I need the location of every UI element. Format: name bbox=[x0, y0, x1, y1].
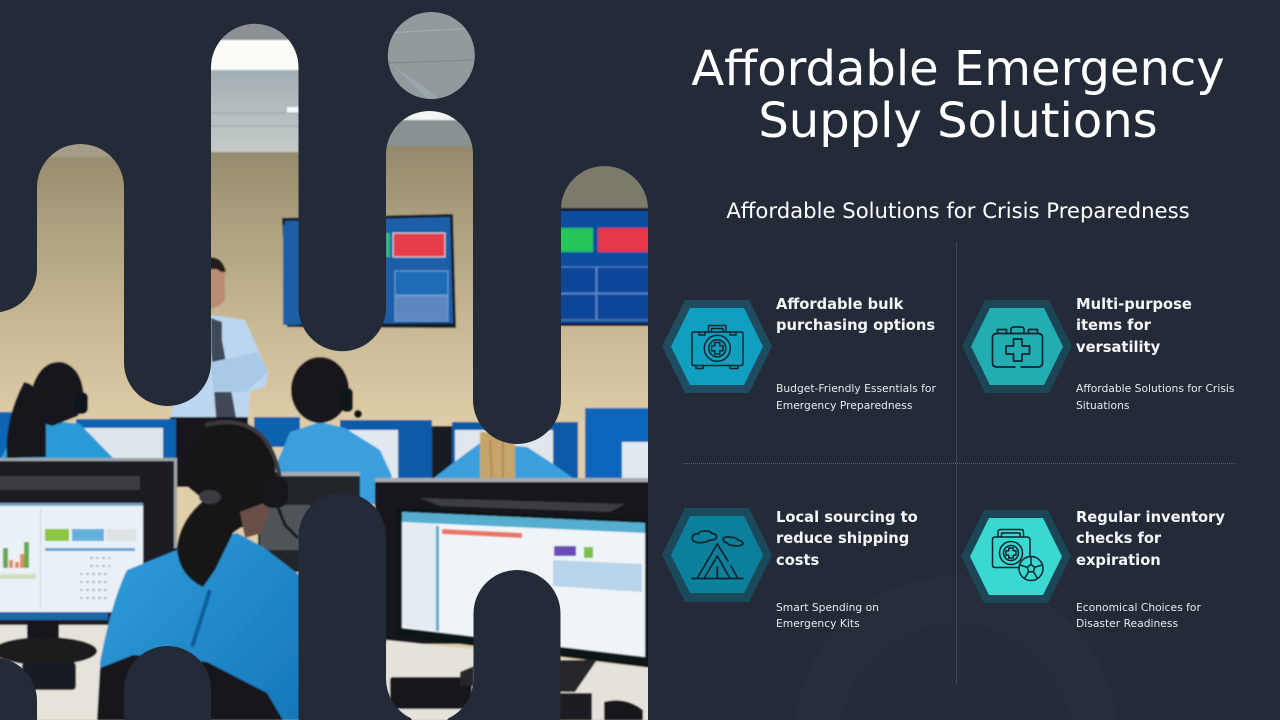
title: Supply Solutions bbox=[758, 93, 1158, 149]
description bbox=[776, 601, 879, 630]
front monitor left bbox=[0, 458, 300, 720]
heading: expiration bbox=[1076, 552, 1161, 569]
item: bulk purchasing bbox=[662, 296, 936, 412]
heading: reduce shipping bbox=[776, 530, 909, 547]
title bbox=[691, 41, 1225, 149]
heading: costs bbox=[776, 552, 819, 569]
ceiling bbox=[30, 20, 652, 210]
photo bbox=[0, 0, 652, 720]
back row monitors bbox=[0, 408, 652, 488]
heading: Multi-purpose bbox=[1076, 296, 1192, 313]
background concentric circles bbox=[780, 560, 1140, 720]
front monitor right bbox=[375, 478, 652, 720]
item: inventory checks bbox=[961, 509, 1225, 630]
icon: first aid case in hexagon bbox=[662, 300, 772, 393]
heading: Regular inventory bbox=[1076, 509, 1225, 526]
description: Emergency Preparedness bbox=[776, 399, 912, 412]
description: Affordable Solutions for Crisis bbox=[1076, 382, 1234, 395]
dark mask: top strips bbox=[0, 0, 648, 444]
heading: Affordable bulk bbox=[776, 296, 903, 313]
description bbox=[1076, 601, 1201, 630]
back left agent bbox=[0, 362, 113, 460]
subtitle: Affordable Solutions for Crisis Preparedness bbox=[726, 198, 1190, 223]
description bbox=[776, 382, 936, 412]
heading: purchasing options bbox=[776, 317, 935, 334]
description: Economical Choices for bbox=[1076, 601, 1201, 614]
horizontal divider bbox=[683, 463, 1236, 464]
description: Emergency Kits bbox=[776, 617, 860, 630]
description bbox=[1076, 382, 1234, 412]
icon: tent and clouds in hexagon bbox=[662, 508, 772, 602]
heading: checks for bbox=[1076, 530, 1161, 547]
item: local sourcing bbox=[662, 508, 918, 630]
icon: kit and ball in hexagon bbox=[961, 510, 1071, 603]
description: Disaster Readiness bbox=[1076, 617, 1178, 630]
wall TV right bbox=[556, 208, 652, 326]
description: Smart Spending on bbox=[776, 601, 879, 614]
heading bbox=[1076, 509, 1225, 569]
heading: items for bbox=[1076, 317, 1151, 334]
heading: Local sourcing to bbox=[776, 509, 918, 526]
wall TV left bbox=[282, 214, 456, 328]
icon: medical kit in hexagon bbox=[962, 300, 1072, 393]
item: multi-purpose bbox=[962, 296, 1234, 412]
vertical divider bbox=[956, 243, 957, 683]
title: Affordable Emergency bbox=[691, 41, 1225, 97]
front agent bbox=[97, 420, 302, 720]
description: Budget-Friendly Essentials for bbox=[776, 382, 936, 395]
heading bbox=[1076, 296, 1192, 356]
heading: versatility bbox=[1076, 339, 1160, 356]
back middle agent bbox=[274, 357, 392, 505]
description: Situations bbox=[1076, 399, 1129, 412]
dark mask: bottom strips bbox=[0, 493, 560, 720]
photo panel: call centre seen through rounded strips bbox=[0, 12, 648, 720]
presenter bbox=[170, 257, 268, 487]
heading bbox=[776, 296, 935, 334]
heading bbox=[776, 509, 918, 569]
back right agent bbox=[434, 432, 578, 484]
top circle window bbox=[387, 12, 476, 99]
small rear monitor bbox=[258, 472, 360, 572]
